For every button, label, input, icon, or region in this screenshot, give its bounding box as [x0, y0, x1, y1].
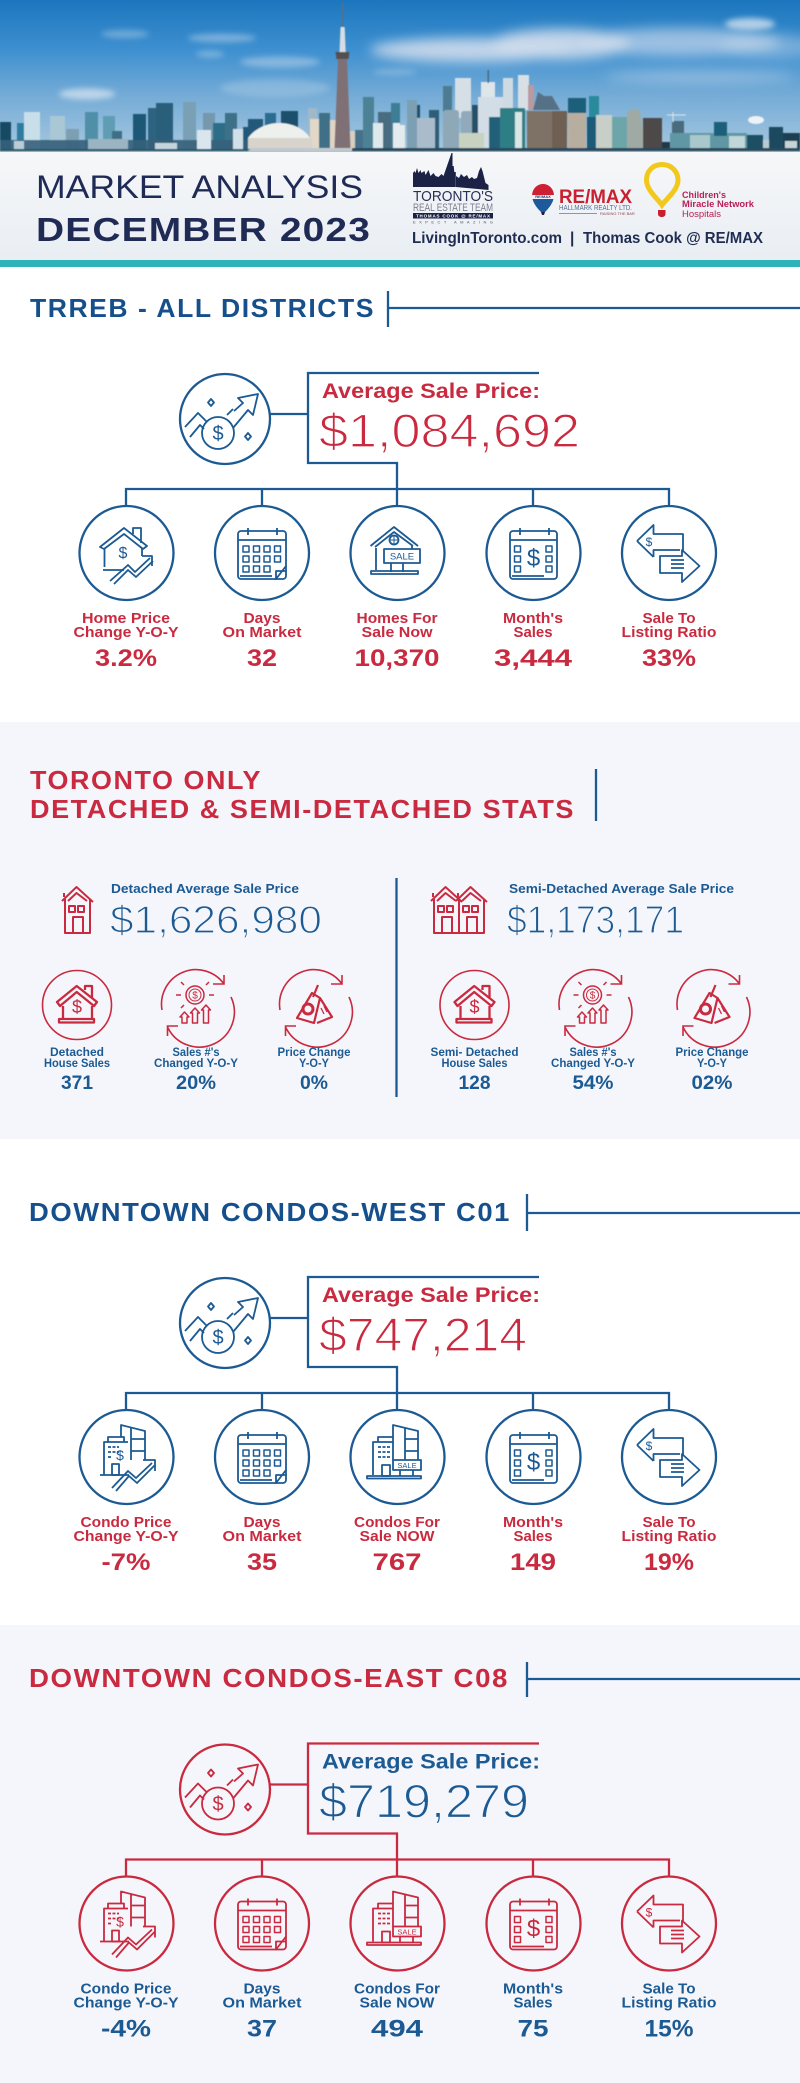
stat: detached house sales: House Sales	[44, 1058, 110, 1070]
average sale price: $747,214	[319, 1308, 527, 1361]
panel: TRREB all districts	[30, 291, 800, 672]
icon: price trend	[185, 394, 258, 449]
detached price	[110, 881, 322, 942]
stat: month's sales: $	[527, 545, 540, 572]
stat: condo price change	[74, 1892, 179, 2042]
stat: homes for sale: Homes For	[356, 611, 438, 627]
stat: price change: Price Change	[278, 1047, 350, 1059]
average sale price	[319, 1284, 540, 1361]
stat: month's sales: 75	[518, 2016, 548, 2042]
stat: homes for sale: 10,370	[354, 645, 440, 672]
detached column	[42, 881, 352, 1094]
stat: price change: Y-O-Y	[299, 1058, 329, 1070]
stat: homes for sale: SALE	[390, 552, 414, 562]
stat: condo price change: $	[116, 1447, 124, 1463]
stat: condos for sale: Condos For	[354, 1515, 440, 1531]
stat: homes for sale	[354, 527, 440, 672]
semi-detached price: $1,173,171	[507, 899, 684, 942]
teal stripe	[0, 260, 800, 267]
logo: Toronto's Real Estate Team: EXPECT AMAZING	[413, 220, 493, 224]
stat: days on market: On Market	[222, 1996, 302, 2012]
average sale price: $1,084,692	[319, 404, 580, 457]
icon: price trend	[185, 1298, 258, 1353]
stat: condo price change: Condo Price	[80, 1982, 172, 1998]
stat: month's sales: Sales	[514, 1996, 552, 2012]
header website line: |	[570, 230, 574, 247]
stat: sales changed: $	[192, 990, 198, 1002]
org tree lines and circles	[80, 373, 716, 600]
stat: semi-detached house sales: $	[469, 997, 480, 1017]
stat: condo price change: -7%	[102, 1549, 150, 1576]
stat: home price change: Change Y-O-Y	[74, 625, 179, 641]
header white band	[0, 152, 800, 260]
stat: days on market	[222, 1898, 302, 2042]
stat: sale to listing ratio: $	[646, 1906, 653, 1920]
stat: month's sales	[503, 1432, 563, 1576]
stat: semi-detached house sales: Semi- Detached	[430, 1047, 518, 1059]
stat: month's sales: Month's	[503, 1515, 563, 1531]
stat: sale to listing ratio: Listing Ratio	[622, 625, 717, 641]
stat: days on market	[222, 1432, 302, 1576]
stat: condos for sale: Sale NOW	[360, 1996, 435, 2012]
stat: sale to listing ratio: $	[646, 1439, 653, 1453]
stat: sale to listing ratio: 15%	[644, 2016, 694, 2042]
stat: semi sales changed: Changed Y-O-Y	[551, 1058, 635, 1070]
stat: days on market: On Market	[222, 625, 302, 641]
stat: month's sales: $	[527, 1916, 540, 1942]
stat: home price change: Home Price	[82, 611, 170, 627]
stat: sale to listing ratio: Listing Ratio	[622, 1529, 717, 1545]
stat: sales changed: Changed Y-O-Y	[154, 1058, 238, 1070]
stat: condos for sale: SALE	[397, 1928, 417, 1936]
logo: Toronto's Real Estate Team: TORONTO'S	[413, 188, 493, 205]
stat: detached house sales: $	[72, 997, 82, 1017]
stat: condos for sale: Condos For	[354, 1982, 440, 1998]
stat: month's sales	[503, 1898, 563, 2042]
heading: West C01: DOWNTOWN CONDOS-WEST C01	[29, 1197, 511, 1227]
detached price: $1,626,980	[110, 899, 322, 942]
heading: Toronto only: TORONTO ONLY	[30, 765, 262, 795]
stat: month's sales	[494, 528, 573, 672]
semi-detached price: Semi-Detached Average Sale Price	[509, 881, 734, 896]
stat: sales changed	[154, 970, 238, 1094]
stat: condos for sale: SALE	[397, 1461, 417, 1470]
stat: sale to listing ratio	[622, 1429, 717, 1576]
stat: days on market: On Market	[222, 1529, 302, 1545]
stat: sale to listing ratio: Sale To	[642, 1515, 696, 1531]
stat: days on market: 37	[247, 2016, 277, 2042]
heading: Toronto only	[30, 765, 575, 824]
icon: price trend: $	[212, 1327, 224, 1349]
logo: RE/MAX Hallmark: RE/MAX	[535, 194, 551, 199]
stat: days on market: Days	[244, 1515, 280, 1531]
stat: condos for sale: Sale NOW	[360, 1529, 435, 1545]
stat: condos for sale	[354, 1425, 440, 1576]
semi-detached price	[507, 881, 734, 942]
title: DECEMBER 2023	[36, 212, 371, 249]
stat: month's sales: Month's	[503, 1982, 563, 1998]
stat: sale to listing ratio	[622, 525, 717, 672]
header website line: LivingInToronto.com	[412, 230, 562, 247]
header photo: Toronto skyline	[0, 0, 800, 153]
skyline buildings	[0, 3, 800, 151]
heading rule	[527, 1194, 800, 1231]
stat: month's sales: Sales	[514, 625, 552, 641]
title	[36, 169, 371, 249]
stat: days on market: Days	[244, 611, 280, 627]
stat: semi price change: 02%	[692, 1073, 733, 1094]
stat: month's sales: 149	[510, 1549, 556, 1576]
average sale price: $719,279	[319, 1774, 529, 1828]
header website line: Thomas Cook @ RE/MAX	[583, 230, 764, 247]
stat: semi sales changed	[551, 970, 635, 1094]
stat: condo price change: Condo Price	[80, 1515, 172, 1531]
heading: East C08: DOWNTOWN CONDOS-EAST C08	[29, 1663, 509, 1693]
detached price: Detached Average Sale Price	[111, 881, 299, 896]
heading rule	[595, 769, 597, 821]
stat: condos for sale	[354, 1892, 440, 2042]
stat: semi price change	[676, 970, 750, 1094]
stat: condos for sale: 494	[371, 2016, 424, 2042]
average sale price	[319, 1750, 540, 1828]
logo: RE/MAX Hallmark: RAISING THE BAR	[600, 211, 635, 216]
stat: price change: 0%	[300, 1073, 328, 1094]
org tree lines and circles	[80, 1277, 716, 1504]
block content	[74, 1744, 717, 2042]
stat: sales changed: 20%	[176, 1073, 216, 1094]
stat: semi price change: Y-O-Y	[697, 1058, 727, 1070]
stat: condo price change: $	[116, 1914, 124, 1930]
centre divider	[395, 878, 398, 1097]
logo: Toronto's Real Estate Team: THOMAS COOK @ RE/MAX	[416, 214, 490, 218]
title: MARKET ANALYSIS	[36, 169, 363, 205]
stat: days on market: 35	[247, 1549, 277, 1576]
icon: price trend: $	[212, 423, 224, 445]
icon: semi-detached houses	[431, 887, 487, 933]
logo: Toronto's Real Estate Team: REAL ESTATE TEAM	[413, 202, 493, 214]
stat: month's sales: $	[527, 1449, 540, 1476]
icon: price trend	[185, 1764, 258, 1820]
stat: detached house sales: 371	[61, 1073, 93, 1094]
stat: semi-detached house sales: House Sales	[442, 1058, 508, 1070]
stat: sale to listing ratio	[622, 1896, 717, 2042]
stat: month's sales: Month's	[503, 611, 563, 627]
panel: Downtown condos east C08	[29, 1662, 800, 2042]
panel: Downtown condos west C01	[29, 1194, 800, 1576]
stat: condo price change	[74, 1425, 179, 1576]
heading: Toronto only: DETACHED & SEMI-DETACHED STATS	[30, 794, 575, 824]
logo: Children's Miracle Network Hospitals: Miracle Network	[682, 199, 755, 210]
stat: home price change: $	[119, 545, 128, 562]
stat: semi sales changed: Sales #'s	[570, 1047, 616, 1059]
header website line	[412, 230, 764, 247]
stat: sale to listing ratio: Sale To	[642, 611, 696, 627]
stat: days on market: 32	[247, 645, 277, 672]
average sale price: Average Sale Price:	[322, 1750, 540, 1774]
stat: days on market	[222, 528, 302, 672]
stat: condo price change: -4%	[101, 2016, 151, 2042]
stat: sale to listing ratio: Listing Ratio	[622, 1996, 717, 2012]
stat: semi-detached house sales: 128	[458, 1073, 490, 1094]
heading rule	[388, 291, 800, 327]
stat: price change	[278, 970, 352, 1094]
stat: home price change	[74, 528, 179, 672]
org tree lines and circles	[80, 1744, 716, 1970]
stat: semi-detached house sales	[430, 970, 518, 1094]
heading: TRREB: TRREB - ALL DISTRICTS	[30, 293, 375, 323]
stat: semi sales changed: $	[590, 990, 596, 1002]
semi-detached column	[430, 881, 750, 1094]
logo: RE/MAX Hallmark: RE/MAX	[559, 187, 632, 208]
logo: Children's Miracle Network Hospitals: Hospitals	[682, 209, 721, 220]
stat: month's sales: Sales	[514, 1529, 552, 1545]
logo: RE/MAX Hallmark	[532, 184, 635, 216]
stat: condo price change: Change Y-O-Y	[74, 1996, 179, 2012]
logo: Toronto's Real Estate Team	[413, 153, 493, 224]
logo: Children's Miracle Network Hospitals	[646, 164, 755, 220]
stat: detached house sales: Detached	[50, 1047, 104, 1059]
stat: sales changed: Sales #'s	[172, 1047, 220, 1059]
icon: price trend: $	[212, 1794, 224, 1816]
stat: semi price change: Price Change	[676, 1047, 748, 1059]
stat: sale to listing ratio: $	[646, 535, 653, 549]
stat: detached house sales	[42, 970, 112, 1094]
stat: sale to listing ratio: Sale To	[642, 1982, 696, 1998]
stat: month's sales: 3,444	[494, 645, 573, 672]
logo: Children's Miracle Network Hospitals: Children's	[682, 190, 726, 201]
logo: RE/MAX Hallmark: HALLMARK REALTY LTD.	[559, 203, 632, 212]
stat: home price change: 3.2%	[95, 645, 157, 672]
stat: sale to listing ratio: 33%	[642, 645, 696, 672]
stat: homes for sale: Sale Now	[362, 625, 433, 641]
block content	[74, 1277, 717, 1576]
heading rule	[527, 1662, 800, 1697]
stat: condos for sale: 767	[372, 1549, 422, 1576]
average sale price: Average Sale Price:	[322, 1284, 540, 1307]
icon: detached house	[62, 887, 93, 933]
panel: Toronto detached and semi-detached	[30, 765, 750, 1097]
average sale price: Average Sale Price:	[322, 380, 540, 403]
average sale price	[319, 380, 580, 457]
stat: semi sales changed: 54%	[572, 1073, 614, 1094]
stat: condo price change: Change Y-O-Y	[74, 1529, 179, 1545]
stat: sale to listing ratio: 19%	[644, 1549, 694, 1576]
stat: days on market: Days	[244, 1982, 280, 1998]
